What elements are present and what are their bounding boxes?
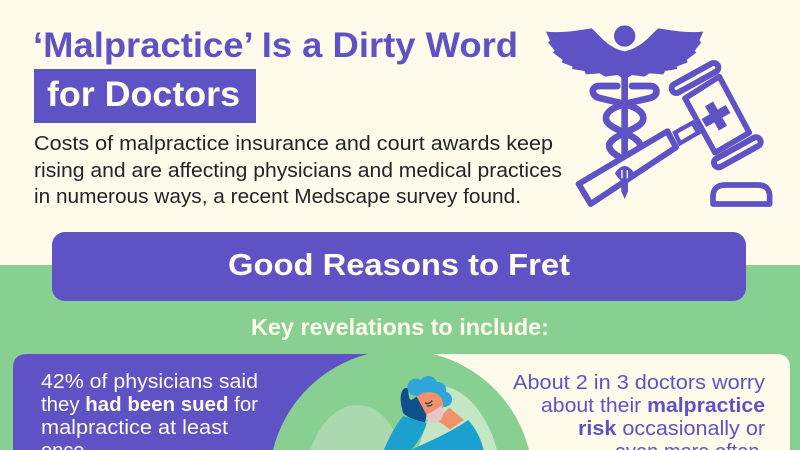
- banner: Good Reasons to Fret: Good Reasons to Fret: [228, 247, 570, 282]
- illustration: stressed doctor: [310, 376, 497, 450]
- panel: 2 in 3 worry: About 2 in 3 doctors worry: [513, 372, 765, 394]
- caduceus wings: [546, 28, 703, 80]
- snake over handle: [617, 168, 632, 180]
- gavel neck: [675, 123, 698, 143]
- intro paragraph: rising and are affecting physicians and medical practices: [34, 160, 562, 182]
- gavel body: [685, 77, 749, 153]
- snake knot highlight: [622, 170, 627, 178]
- doctor torso: [408, 420, 484, 450]
- title line one: ‘Malpractice’ Is a Dirty Word: [33, 26, 518, 65]
- background blob right: [417, 387, 497, 450]
- banner: Good Reasons to Fret: [52, 232, 746, 301]
- doctor raised arm: [383, 416, 427, 450]
- gavel handle: [579, 131, 676, 204]
- doctor closed eye: [425, 401, 432, 406]
- panel: 42 percent sued: malpractice at least: [41, 417, 228, 439]
- caduceus head: [614, 25, 635, 47]
- intro paragraph: Costs of malpractice insurance and court awards keep: [34, 133, 553, 155]
- panel: 2 in 3 worry: about their malpractice: [541, 395, 765, 417]
- intro paragraph: [34, 133, 562, 208]
- caduceus staff: [621, 73, 628, 199]
- subheading: Key revelations to include:: [251, 314, 549, 340]
- gavel top cap: [670, 61, 720, 95]
- panel: 42 percent sued: they had been sued for: [41, 394, 258, 416]
- gavel cross: [697, 97, 735, 135]
- caduceus snakes: [593, 86, 656, 178]
- doctor hand: [401, 388, 427, 423]
- panel: 42 percent sued: 42% of physicians said: [41, 371, 258, 393]
- title highlight: for Doctors: for Doctors: [47, 75, 240, 114]
- gavel bottom cap: [712, 136, 762, 169]
- doctor mask: [426, 406, 443, 423]
- doctor neck: [437, 408, 464, 429]
- doctor face: [416, 392, 443, 422]
- intro paragraph: in numerous ways, a recent Medscape survey found.: [34, 186, 521, 208]
- background blob left: [310, 405, 400, 450]
- panel: 42 percent sued: [13, 354, 368, 450]
- panel: 2 in 3 worry: [433, 354, 790, 450]
- title highlight: for Doctors: [34, 69, 256, 123]
- doctor cap: [407, 376, 452, 407]
- gavel base: [713, 185, 770, 204]
- icon: caduceus and gavel: [546, 25, 770, 204]
- panel: 2 in 3 worry: risk occasionally or: [578, 418, 765, 440]
